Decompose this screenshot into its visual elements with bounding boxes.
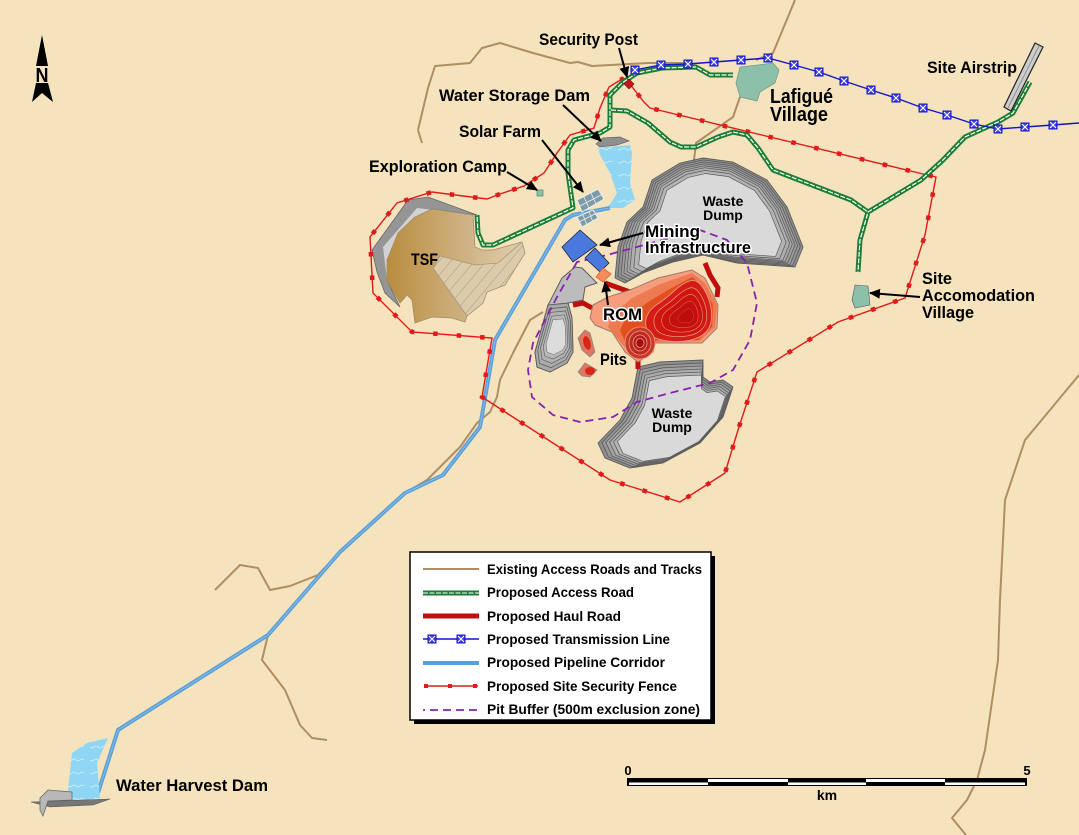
feature labels: Site <box>922 269 952 288</box>
feature labels: Mining <box>645 222 700 241</box>
feature labels: Village <box>770 104 828 126</box>
pipeline corridor <box>98 208 610 793</box>
security post marker <box>624 79 634 89</box>
scale bar: 0 <box>624 763 632 778</box>
legend: pipeline corridor: Proposed Pipeline Corridor <box>487 654 666 670</box>
arrows to features <box>507 48 920 305</box>
proposed access road <box>477 67 1030 272</box>
scale bar <box>624 763 1031 803</box>
feature labels <box>116 31 1035 795</box>
tailings storage facility <box>372 197 525 323</box>
exploration camp marker <box>537 190 543 196</box>
legend: security fence: Proposed Site Security Fence <box>487 678 677 694</box>
legend: haul road: Proposed Haul Road <box>487 608 621 624</box>
water storage dam wall <box>596 137 629 147</box>
label: waste dump north: Dump <box>703 207 743 223</box>
legend <box>410 552 715 724</box>
feature labels: Security Post <box>539 31 638 49</box>
legend: access road: Proposed Access Road <box>487 584 634 600</box>
ROM pad <box>596 268 611 282</box>
water harvest dam <box>31 738 110 816</box>
feature labels: Water Storage Dam <box>439 87 590 105</box>
site accommodation village area <box>852 285 870 308</box>
site airstrip <box>1004 43 1043 111</box>
haul roads <box>573 263 718 369</box>
feature labels: Accomodation <box>922 286 1035 305</box>
feature labels: Lafigué <box>770 86 833 108</box>
north arrow: N <box>36 65 48 87</box>
feature labels: Solar Farm <box>459 123 541 141</box>
waste dump north <box>615 158 803 283</box>
feature labels: Pits <box>600 350 627 369</box>
main open pit <box>590 270 718 362</box>
west waste dump <box>535 267 597 372</box>
label: waste dump north: Waste <box>703 193 744 209</box>
feature labels: Exploration Camp <box>369 158 507 176</box>
legend: existing roads: Existing Access Roads and Tracks <box>487 561 702 577</box>
label: waste dump south: Dump <box>652 419 692 435</box>
feature labels: ROM <box>603 305 642 324</box>
security fence <box>370 79 936 502</box>
label: TSF: TSF <box>411 250 438 269</box>
solar farm <box>577 189 604 227</box>
mining infrastructure <box>562 230 609 272</box>
pit buffer exclusion zone <box>528 230 757 422</box>
small pit north <box>578 330 595 357</box>
scale bar: km <box>817 787 837 803</box>
small pit south <box>578 363 597 377</box>
legend: pit buffer: Pit Buffer (500m exclusion zone) <box>487 701 700 717</box>
north arrow <box>32 35 53 102</box>
water storage reservoir <box>598 145 635 208</box>
scale bar: 5 <box>1023 763 1031 778</box>
feature labels: Village <box>922 303 974 322</box>
feature labels: Site Airstrip <box>927 59 1017 77</box>
feature labels: Infrastructure <box>645 238 751 257</box>
transmission line <box>635 58 1079 129</box>
legend: transmission line: Proposed Transmission Line <box>487 631 670 647</box>
waste dump south <box>598 360 733 468</box>
label: waste dump south: Waste <box>652 405 693 421</box>
Lafigué village area <box>736 63 779 101</box>
feature labels: Water Harvest Dam <box>116 776 268 795</box>
